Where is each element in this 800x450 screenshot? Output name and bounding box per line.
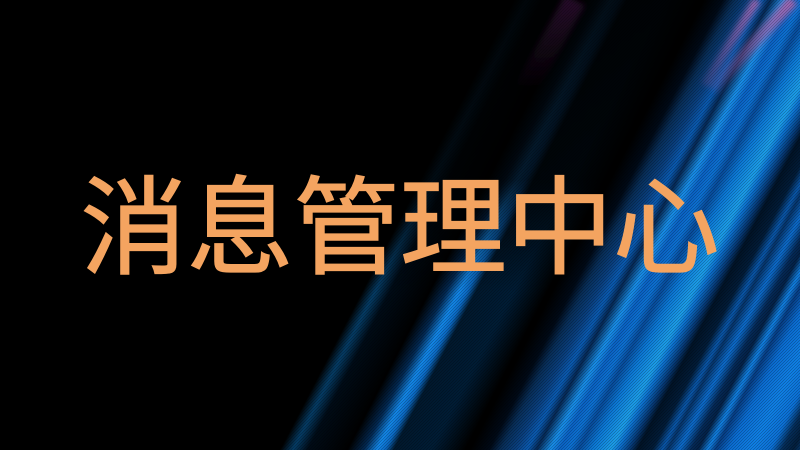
background: diagonal blue light streaks [281,0,800,450]
title: 消息管理中心 [80,169,720,288]
